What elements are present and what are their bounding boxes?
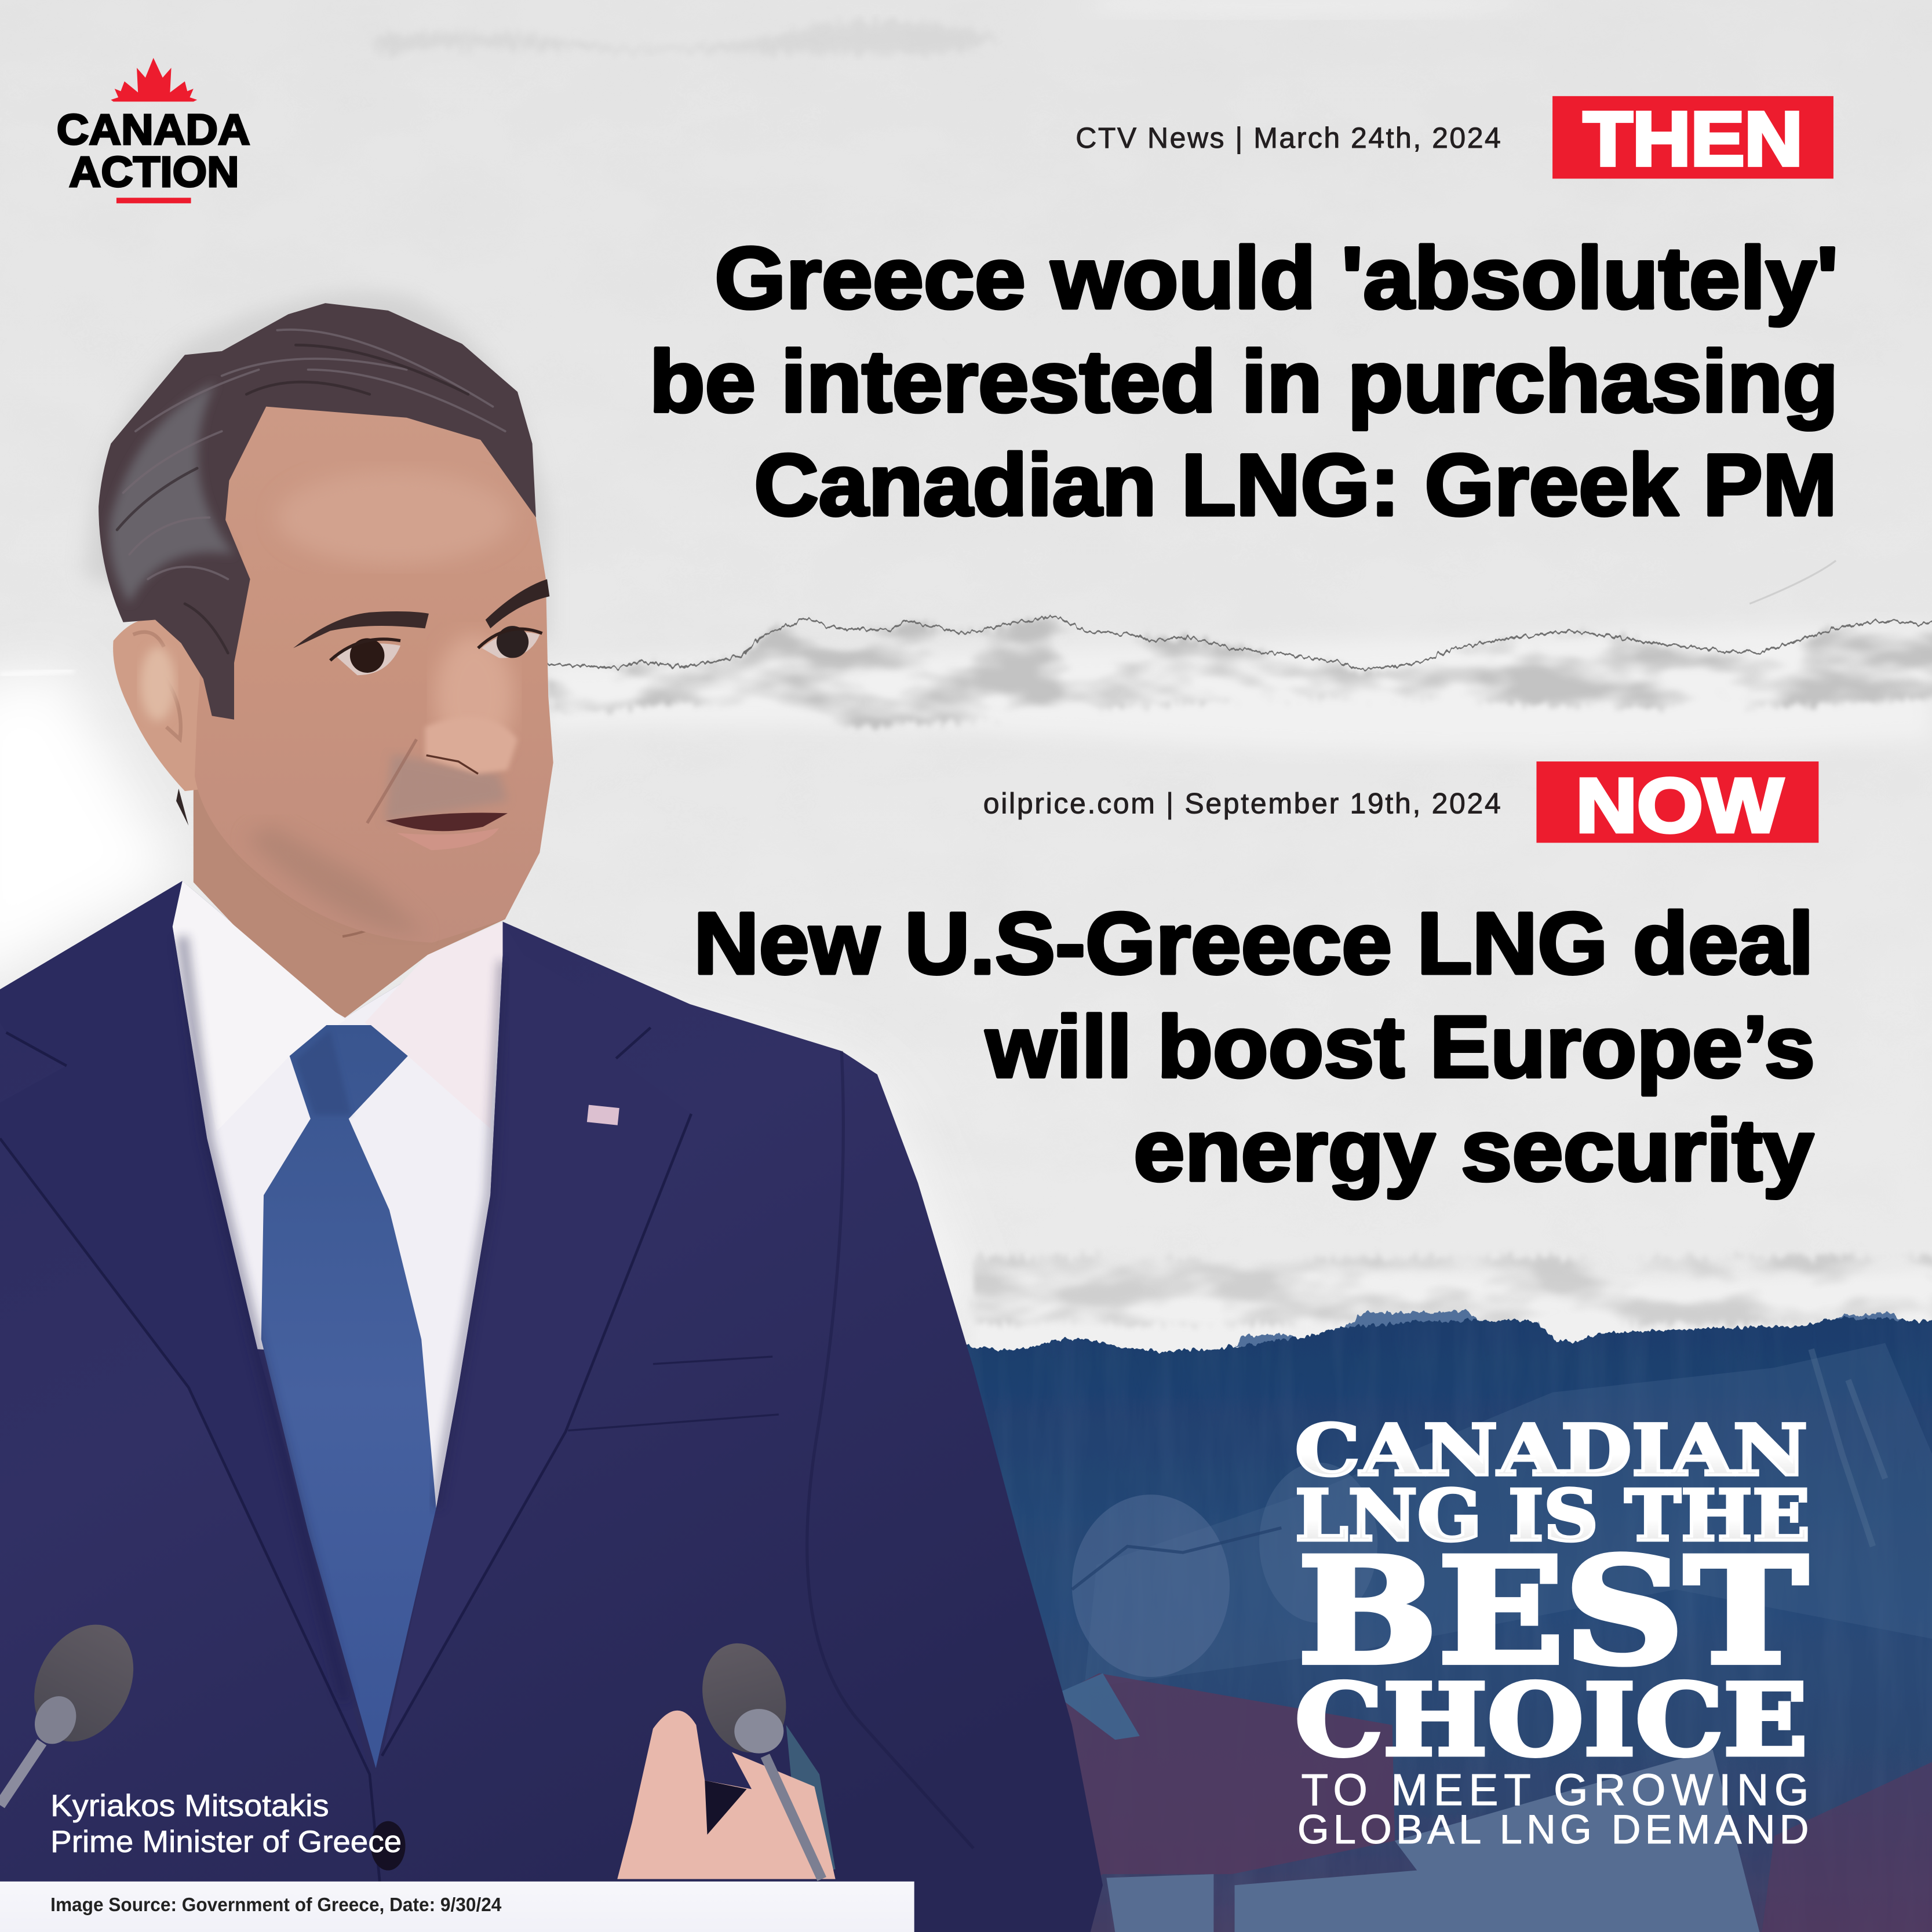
- torn paper tear: middle: [548, 616, 1932, 752]
- source line: CTV News: CTV News | March 24th, 2024: [1076, 122, 1501, 154]
- suit seams and shadows: [0, 936, 974, 1932]
- call to action: [1295, 1409, 1810, 1852]
- torn paper strip above the blue panel: [974, 1257, 1932, 1368]
- caption: name and title: Kyriakos Mitsotakis: [50, 1789, 329, 1823]
- photo: Kyriakos Mitsotakis: [0, 303, 1103, 1932]
- headline: then: Greece would 'absolutely': [715, 229, 1838, 327]
- cheek highlight and beard shadow: [435, 635, 514, 758]
- neck: [194, 789, 505, 1018]
- badge: NOW: [1536, 761, 1818, 848]
- hand: [617, 1711, 836, 1879]
- headline: now: New U.S-Greece LNG deal: [694, 894, 1814, 992]
- headline: then: be interested in purchasing: [650, 332, 1838, 430]
- call to action: TO MEET GROWING: [1301, 1766, 1809, 1815]
- suit jacket: [0, 881, 1103, 1932]
- call to action: BEST: [1297, 1526, 1807, 1697]
- button: [371, 1821, 406, 1871]
- hair: [99, 303, 536, 720]
- hair highlights: [110, 330, 505, 653]
- left eyebrow: [293, 611, 429, 648]
- headline: now: will boost Europe’s: [985, 997, 1815, 1095]
- headline: now: energy security: [1133, 1101, 1814, 1199]
- badge: NOW: NOW: [1576, 763, 1783, 848]
- collar right: [364, 921, 503, 1129]
- lapel pin: [587, 1105, 619, 1125]
- icon: maple leaf: [111, 58, 197, 101]
- call to action: CHOICE: [1295, 1663, 1807, 1778]
- logo: Canada Action: CANADA: [57, 105, 250, 154]
- headline: then: Canadian LNG: Greek PM: [754, 436, 1837, 534]
- headline: now: [694, 894, 1815, 1199]
- white halo behind the person: [0, 665, 986, 1330]
- shirt: [173, 881, 503, 1508]
- call to action: LNG IS THE: [1295, 1474, 1810, 1557]
- soft shadow around the head: [86, 291, 548, 641]
- left microphone: [0, 1607, 153, 1805]
- image source credit: Image Source: Government of Greece, Date: 9/30/24: [50, 1894, 502, 1915]
- call to action: CANADIAN: [1295, 1409, 1807, 1492]
- right lapel: [382, 921, 691, 1756]
- ear: [113, 619, 234, 791]
- right eye: [478, 626, 542, 658]
- left lapel: [0, 881, 370, 1774]
- hand backdrop gap: [786, 1725, 836, 1879]
- headline: then: [650, 229, 1838, 534]
- right eyebrow: [486, 579, 549, 628]
- logo: Canada Action: [57, 58, 250, 203]
- face: [195, 382, 553, 943]
- collar left: [173, 881, 345, 1131]
- tie: [261, 1025, 436, 1768]
- caption: name and title: Prime Minister of Greece: [50, 1825, 402, 1859]
- podium: [0, 1882, 914, 1932]
- right microphone: [691, 1634, 822, 1879]
- mouth: [386, 812, 508, 831]
- call to action: GLOBAL LNG DEMAND: [1297, 1806, 1809, 1852]
- badge: THEN: THEN: [1583, 96, 1803, 181]
- left eye: [330, 638, 400, 675]
- blue lower-right panel with facility and flag: [961, 1306, 1932, 1932]
- source line: oilprice.com: oilprice.com | September 19th, 2024: [983, 787, 1501, 819]
- caption: name and title: [50, 1789, 402, 1859]
- logo: Canada Action: ACTION: [69, 148, 239, 196]
